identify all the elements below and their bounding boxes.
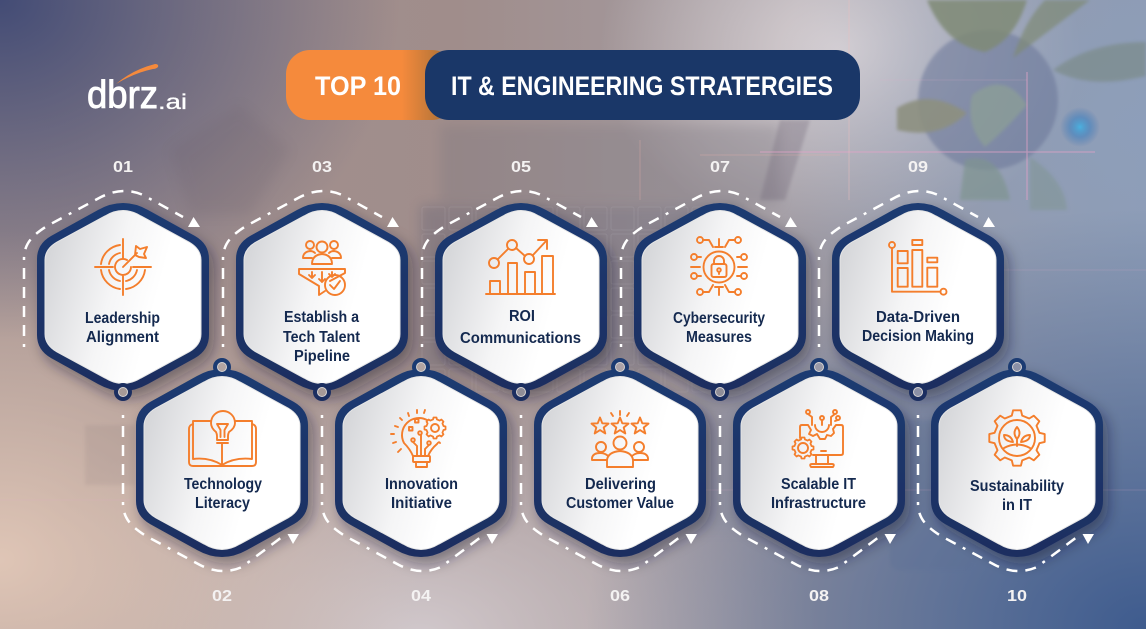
- step 03: Establish a Tech Talent Pipeline: Tech Talent: [283, 329, 360, 346]
- step 04: Innovation Initiative: Initiative: [391, 495, 452, 512]
- step 10: Sustainability in IT: Sustainability: [970, 478, 1064, 495]
- navy pill: heading: [425, 50, 860, 120]
- icon: padlock in circuit ring: [691, 237, 747, 295]
- step 01: Leadership Alignment: [24, 159, 209, 401]
- step 02: Technology Literacy: Literacy: [195, 495, 250, 512]
- icon: book with lightbulb: [189, 411, 256, 466]
- step 01: Leadership Alignment: 01: [113, 159, 133, 176]
- step 02: Technology Literacy: Technology: [184, 476, 262, 493]
- step 06: Delivering Customer Value: [521, 358, 706, 605]
- step 01: Leadership Alignment: Alignment: [86, 329, 159, 346]
- step 10: Sustainability in IT: [918, 358, 1103, 605]
- step 03: Establish a Tech Talent Pipeline: [223, 159, 408, 401]
- step 06: Delivering Customer Value: 06: [610, 588, 630, 605]
- step 02: Technology Literacy: 02: [212, 588, 232, 605]
- step 06: Delivering Customer Value: Customer Value: [566, 495, 674, 512]
- orange pill: TOP 10: [286, 50, 456, 120]
- step 09: Data-Driven Decision Making: [819, 159, 1004, 401]
- step 04: Innovation Initiative: 04: [411, 588, 431, 605]
- step 09: Data-Driven Decision Making: Data-Driven: [876, 309, 960, 326]
- logo: dbrz.ai: [87, 64, 187, 117]
- step 10: Sustainability in IT: 10: [1007, 588, 1027, 605]
- step 08: Scalable IT Infrastructure: Infrastructure: [771, 495, 866, 512]
- logo: dbrz.ai: .ai: [158, 91, 187, 114]
- step 07: Cybersecurity Measures: [621, 159, 806, 401]
- icon: rising bar chart: [486, 240, 555, 294]
- step 10: Sustainability in IT: in IT: [1002, 497, 1032, 514]
- step 05: ROI Communications: ROI: [509, 308, 535, 325]
- icon: data bar chart: [889, 240, 946, 295]
- step 09: Data-Driven Decision Making: Decision Making: [862, 328, 974, 345]
- icon: target with arrow: [95, 239, 151, 295]
- icon: lightbulb with gear and circuits: [391, 410, 446, 467]
- step 09: Data-Driven Decision Making: 09: [908, 159, 928, 176]
- step 03: Establish a Tech Talent Pipeline: 03: [312, 159, 332, 176]
- step 05: ROI Communications: Communications: [460, 330, 581, 347]
- logo: dbrz.ai: dbrz: [87, 74, 158, 117]
- step 08: Scalable IT Infrastructure: 08: [809, 588, 829, 605]
- step 08: Scalable IT Infrastructure: Scalable IT: [781, 476, 856, 493]
- icon: monitor with gears and circuits: [792, 410, 843, 467]
- step 05: ROI Communications: 05: [511, 159, 531, 176]
- icon: three stars and customers: [592, 411, 648, 467]
- icon: people funnel with check: [299, 241, 345, 295]
- step 02: Technology Literacy: [123, 358, 308, 605]
- step 03: Establish a Tech Talent Pipeline: Establish a: [284, 309, 359, 326]
- step 03: Establish a Tech Talent Pipeline: Pipeline: [294, 348, 350, 365]
- step 04: Innovation Initiative: Innovation: [385, 476, 458, 493]
- step 07: Cybersecurity Measures: 07: [710, 159, 730, 176]
- step 05: ROI Communications: [422, 159, 607, 401]
- step 07: Cybersecurity Measures: Measures: [686, 329, 752, 346]
- step 08: Scalable IT Infrastructure: [720, 358, 905, 605]
- icon: gear with plant: [989, 410, 1045, 466]
- step 06: Delivering Customer Value: Delivering: [585, 476, 656, 493]
- navy pill: heading: IT & ENGINEERING STRATERGIES: [451, 71, 833, 101]
- step 01: Leadership Alignment: Leadership: [85, 310, 160, 327]
- step 07: Cybersecurity Measures: Cybersecurity: [673, 310, 765, 327]
- step 04: Innovation Initiative: [322, 358, 507, 605]
- orange pill: TOP 10: TOP 10: [315, 71, 401, 101]
- title banner: [286, 50, 860, 120]
